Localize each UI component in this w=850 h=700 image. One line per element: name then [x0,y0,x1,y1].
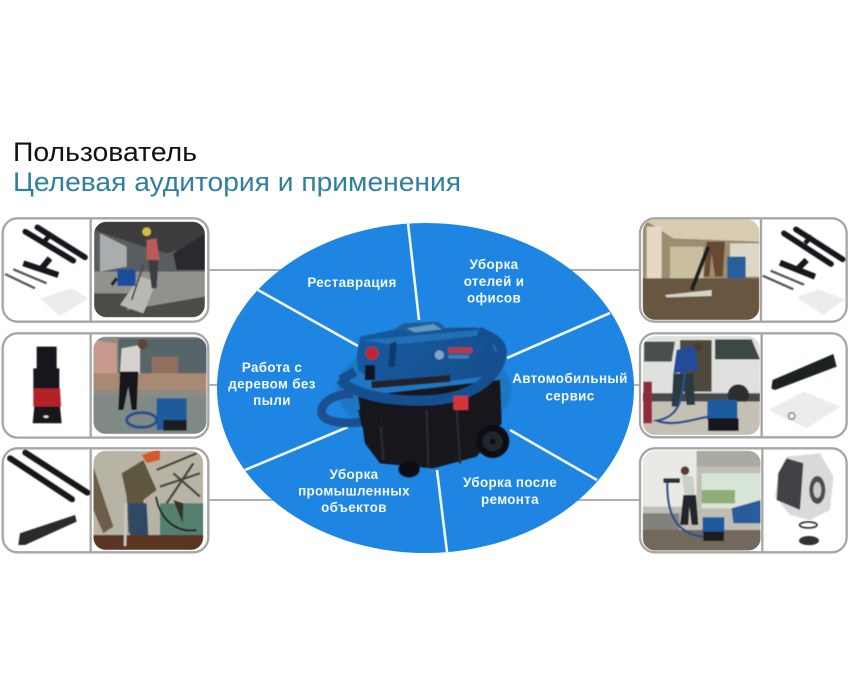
bucket [358,380,502,468]
panel: industrial [3,448,208,552]
segment dividers [245,223,610,552]
wheel [476,425,509,458]
vacuum cleaner [322,322,511,477]
label: after renovation: ремонта [481,492,539,507]
photo: office cleaning [643,219,759,320]
photo: car cleaning [643,336,760,435]
panel: car service [640,333,847,437]
label: industrial: промышленных [298,484,410,498]
label: industrial: объектов [321,500,387,515]
accessories: tubes, nozzle, bag [763,229,845,315]
label: restoration: Реставрация [307,275,397,290]
segment labels [228,257,628,515]
title [13,137,461,197]
label: hotels and offices: офисов [467,290,521,306]
photo: renovated room [643,451,761,551]
label: car service: Автомобильный [512,371,628,386]
accessory: adapter [33,347,62,423]
label: hotels and offices: отелей и [464,274,524,289]
label: industrial: Уборка [330,467,379,482]
photo: industrial site [93,448,203,550]
photo: construction site [94,222,205,317]
label: car service: сервис [545,388,595,404]
photo: woodworking shop [93,337,207,434]
heading: user: Пользователь [13,137,197,167]
left panels [3,218,208,552]
right panels [640,218,847,552]
head [357,327,498,385]
accessory: dust box [775,453,833,545]
panel: after renovation [640,448,847,552]
label: woodworking: Работа с [242,360,302,375]
latch [453,396,468,410]
subheading: target audience: Целевая аудитория и применения [13,167,461,197]
panel: hotels and offices [640,218,847,322]
label: hotels and offices: Уборка [470,257,519,272]
label: after renovation: Уборка после [463,475,557,490]
central blue ellipse [217,223,634,553]
hose [341,332,502,401]
panel: woodworking [3,333,208,438]
label: woodworking: пыли [253,393,291,408]
accessories: tubes, nozzle, bag [5,227,88,316]
panel: restoration [3,218,208,322]
connector lines [208,270,640,500]
label: woodworking: деревом без [228,376,316,392]
accessories: tubes, crevice nozzle [10,453,87,545]
accessories: nozzle, bag [768,354,841,428]
